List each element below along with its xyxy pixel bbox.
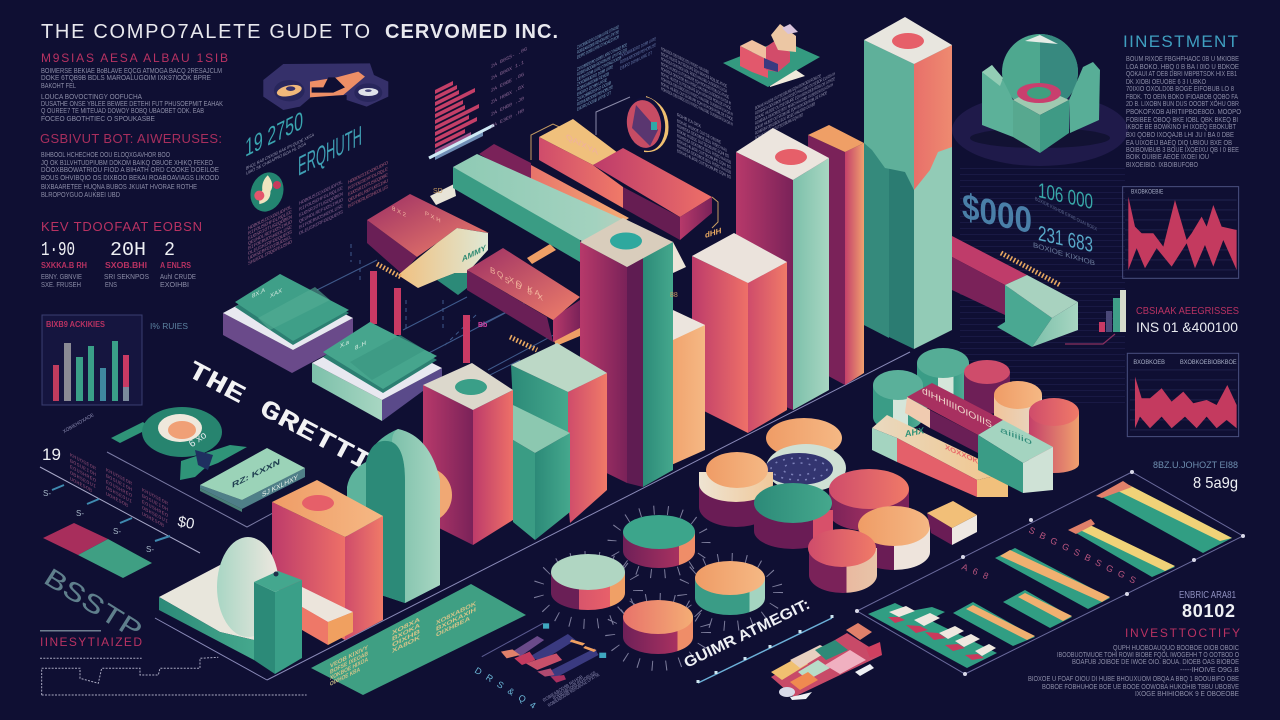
iso pink digits: A 6 8: [960, 562, 990, 581]
investment paragraph: EA UIXOEIJ BAEQ DIQ UBIOU BXE OB: [1126, 138, 1232, 147]
left column: about section: [41, 51, 228, 123]
orange tick label: [377, 264, 401, 277]
right stats: 8 5a9g: [1193, 475, 1238, 492]
iso text blocks: growth details: RIFOUSEHFOLRQLE: [348, 166, 388, 192]
iso text block: blue lines: ZXXOBBEIEIRO DO9B LKRE: [620, 36, 656, 60]
investment footer text: BOAFUB JOIBOE DE IWOE OIO. BOUA. DIOEB OAS BIOBOE: [1072, 657, 1239, 666]
iso text block: lower grey lines: BOKAE HILBOE OUTSEOBURE EQHI BO: [677, 148, 731, 181]
investment paragraph: PBOKOFXOB AIRITIIPBOE8OD. MOOPO: [1126, 107, 1241, 116]
cyan iso labels: D R S & Q 4: [473, 665, 538, 711]
green card on purple base: [223, 274, 353, 373]
left column: key stats: KEV TDOOFAAT EOBSN: [41, 219, 202, 234]
investment paragraph: BOUM RIXOE FBGHFHAOC 0B U MKIOBE: [1126, 54, 1239, 63]
iso text blocks: growth details: HOBOUSIEXOEUOFOL: [248, 204, 292, 232]
small bar chart panel: BIXB9 ACKIKIES: [46, 320, 106, 329]
iso text block: grey lines: ROHBSEA OEKOBOE BOU RISEO HAUOBD OUSEBOR ELKOA IH: [661, 86, 733, 128]
dashed stepped outline: [40, 657, 307, 695]
left column: about section: BOIMERSE BEKIAE BoBLAVE EQCG ATMOGA BACQ 2RESAJCLM: [41, 66, 222, 75]
mint ticket card: [200, 448, 305, 512]
left column: key stats: 2: [164, 239, 175, 261]
iso text block: blue lines: ROBIEABOD8B REHOBUSE LPXTSE: [577, 29, 619, 56]
iso text block: grey lines: BOKAE HILBOE OUTSEOBURE EQHI BOKOEB ROBLOE ATHOE: [661, 81, 733, 123]
iso text block: right of center: BOKAE HILBOE OUTSEOBURE EQHI BOKOEB ROBLOE ATHOE: [755, 90, 827, 132]
left column: key stats: EBNY. GBNVIE: [41, 272, 82, 281]
top long block: [539, 119, 712, 240]
investment paragraph: BIXOEIBIO. IXBOIBUFOBO: [1126, 160, 1198, 169]
green text panel: OIXHBEA: [436, 615, 470, 639]
left column: key stats: EXOIHBI: [160, 280, 189, 289]
left iso annotations: S-: [146, 545, 154, 554]
iso text block: blue lines: ZXXOBBEIEIRO DO9B LKRE OTHOAE BOE: [577, 42, 627, 73]
pink tower with green dot: [423, 363, 513, 545]
iso heading: growth: BHQ1 RA8 CNXOB HAK IPLQUOE XKSA: [246, 132, 315, 172]
iso figures: BOXIOE KIXHOB: [1033, 241, 1095, 268]
red dotted label block: [467, 248, 580, 342]
iso text blocks: growth details: EUOSRIOTUSEQOBE: [348, 172, 388, 198]
left column: about section: FOCEO GBOTHTIEC O SPOUKASBE: [41, 114, 155, 123]
investment paragraph: 70IXIO OXOLD0B BOGE EIFOBUB LO 8: [1126, 84, 1234, 93]
iso text block: blue lines: EIEIRO DO9B LKRE: [577, 77, 607, 98]
icon: cream paper tail: [673, 242, 686, 273]
left column: key stats: A ENLRS: [160, 261, 192, 270]
right cylinder group: [872, 348, 1079, 497]
iso pink digits: [960, 525, 1138, 586]
iso text block: grey lines: BOKAE HILBOE OUTSEOBURE EQHI BOKOEB ROBLOE ATHOE: [661, 51, 727, 90]
iso text block: lower grey lines: ROHBSEA OEKOBOE BOU RISEO HAUOB: [677, 143, 731, 176]
iso text blocks: growth details: [248, 160, 388, 267]
iso text block: right of center: BOKAE HILBOE OUTSEOBURE EQHI BO: [755, 112, 803, 142]
investment paragraph: BXI QOBO IXOQAJB LHI JU I BA 0 DBE: [1126, 130, 1234, 139]
cyan iso labels: ROBIEABOD8B REHOBUSE LPXTSE: [547, 672, 600, 708]
iso text blocks: growth details: BIFOERUOSHEOLUS: [348, 184, 388, 210]
green text panel: OIXHOE KBA: [330, 666, 360, 688]
iso text block: blue lines: ZXXOBBEIEIRO DO9B LKRE: [577, 64, 613, 88]
round target icon with strip: 6 xo: [187, 430, 209, 450]
left column: second section: [40, 131, 222, 199]
green text panel: BXOKA: [392, 622, 420, 643]
left iso annotations: BOSUEIOH: [142, 493, 168, 513]
iso text blocks: growth details: QEUHOLREFUOSIHUO: [299, 197, 343, 225]
left column: second section: DOOXBBOWATRIOU FIOD A BIHATH ORD COOKE DOEILOE: [41, 165, 219, 174]
red back cylinder: [964, 360, 1010, 414]
iso text blocks: growth details: HOBOUSIEXOEUOFOL: [299, 179, 343, 207]
left column: about section: LOUCA BOVOCTINGY OOFUCHA: [41, 92, 142, 101]
left column: key stats: SRI SEKNPOS: [104, 272, 149, 281]
left column: key stats: 1·90: [41, 239, 75, 261]
investment paragraph: LOA BOKO. HBQ 0 B BA I 0IO U BDKOE: [1126, 62, 1239, 71]
iso text block: grey lines: ROHBSEA OEKOBOE BOU RISEO HAUOBD OUSEBOR ELKOA: [661, 56, 727, 95]
red and green parallelogram: [43, 523, 152, 578]
iso text blocks: growth details: HOBOUSIEXOEUOFO: [348, 160, 388, 186]
small bar chart panel: [42, 315, 188, 405]
green column: [254, 571, 302, 674]
left iso annotations: OBHSEOUI: [142, 505, 168, 525]
left iso annotations: KHUOSEOR: [142, 487, 169, 508]
iso text block: lower grey lines: ROHB EA OEK: [677, 112, 702, 130]
mint arch: [347, 429, 440, 603]
iso text block: lower grey lines: BOKAE HILBOE OUTSEOBURE EQHI BO: [677, 138, 731, 171]
title: THE COMPO7ALETE GUDE TO: [41, 21, 370, 43]
iso text blocks: growth details: OLEUSHIRFOEQUEOS: [299, 209, 343, 237]
iso text block: blue lines: ROBIEABOD8B REHOBUSE: [577, 84, 613, 108]
iso heading: growth: 19 2750: [245, 105, 303, 163]
pink brick chart: 2A EHB0 .J0: [491, 96, 524, 118]
left iso annotations: UOHESOB: [106, 491, 129, 509]
left column: second section: GSBIVUT BOT: AIWERUSES:: [40, 131, 222, 146]
iso text block: grey lines: ROHBSEA OEKOBOE BOU RISEO HAUOBD OUSEBOR ELKOA IH: [661, 76, 733, 118]
small markers: 88: [670, 292, 678, 299]
investment paragraph: IKBOE BE BOWKINO IH IXOEQ EBOKUBT: [1126, 122, 1236, 131]
green text panel: [311, 584, 526, 695]
bar 6 with checker marks: [868, 603, 997, 668]
maroon beam with label: [905, 383, 1003, 453]
red dotted label block: 5 D 8 X: [505, 274, 543, 303]
rays and cylinder: orange over teal: [682, 558, 778, 626]
red dotted label block: BQ XO KA: [490, 264, 540, 299]
iso text block: right of center: ROHBSEA OEKOBOE BOU RISEO HAUOBD OUSEBOR ELKOA IH: [755, 82, 833, 127]
pink brick chart: 2A E0BE .0G: [491, 72, 524, 94]
area chart: lower: BXOBKOEB: [1133, 359, 1165, 366]
left iso annotations: S-: [43, 489, 51, 498]
green card on mint base: X.a: [340, 339, 349, 350]
mint left cylinder: [873, 370, 923, 431]
mint ticket card: RZ: KXXN: [232, 456, 280, 490]
investment paragraph: FBDK. TO OEIN BOKO IFIOABOB QOBO FA: [1126, 92, 1238, 101]
left iso annotations: UOHESOB: [142, 511, 165, 529]
bottom iso mini bar chart: [482, 623, 606, 683]
icon: isometric vehicle: [263, 63, 388, 110]
mint beam end: aiiiiio: [1000, 424, 1033, 447]
iso text block: blue lines: [577, 20, 656, 113]
iso text block: right of center: BOKAE HILBOE OUTSEOBURE EQHI BOKOEB ROBLOE: [755, 73, 821, 112]
iso text blocks: growth details: EUOSRIOTUSEQOBEN: [248, 214, 292, 242]
iso text block: lower grey lines: [677, 112, 731, 181]
pink brick chart: ZA H0BX .8X: [491, 83, 525, 106]
left iso annotations: [42, 412, 196, 554]
cream slab: [302, 587, 353, 645]
left iso annotations: OBHSEOUI: [70, 470, 96, 490]
pink label block: [367, 194, 489, 295]
bar 3: [995, 548, 1110, 609]
iso text block: blue lines: ROBIEABOD8B REHOB: [577, 71, 609, 93]
pink label block: 8 X 2: [392, 205, 406, 219]
pink brick chart: 2A B00X 1.1: [491, 60, 524, 82]
back orange tower: [808, 125, 864, 385]
salmon cylinder: [808, 529, 877, 593]
left iso annotations: UOHESOB: [70, 476, 93, 494]
iso text block: right of center: ROHBSEA OEKOBOE BOU RISEO HAUOBD OUSEBOR ELKOA IH: [755, 71, 835, 117]
peach disc behind arch: [396, 467, 452, 523]
left column: second section: BOUS OHVIBQIO OS DIXBOO BEKAI ROABOAVIAGS LIKOOD: [41, 173, 219, 182]
iso text blocks: growth details: EUOSRIOTUSEQOBEN: [299, 191, 343, 219]
left iso annotations: XOBIEHOXAOE: [62, 412, 96, 435]
rays and cylinder: mint top: [538, 554, 638, 624]
cream beam with red face: [872, 415, 1008, 497]
dome icon on purple plinth: [952, 34, 1128, 166]
left column: about section: DUSATHE ONSE YBLEE BEWEE DETEHI FUT PHUSOEPMIT EAHAK: [41, 99, 223, 108]
revenue callout with mini bars: INS 01 &400100: [1136, 319, 1238, 335]
pink brick chart: [429, 46, 527, 160]
salmon right cylinder: [1029, 398, 1079, 473]
pink brick chart: ZA E3E0 .H0: [491, 108, 524, 130]
green text panel: XOKBOE HIXOA: [330, 656, 368, 682]
left column: key stats: 20H: [110, 239, 146, 261]
area chart: upper: BXOBKOEBIE: [1131, 188, 1164, 195]
iso text block: lower grey lines: BOKAE HILBOE OUTSE OBURE: [677, 118, 721, 146]
right stats: 8BZ.U.JOHOZT EI88: [1153, 460, 1238, 470]
right stats: ENBRIC ARA81: [1179, 590, 1236, 601]
small bar chart panel: I% RUIES: [150, 322, 188, 331]
small markers: Bb: [478, 322, 487, 329]
teal cylinder: [754, 483, 833, 549]
iso text block: blue lines: ROBIEABOD8B REHOBUSE LPXTSE EIR: [577, 47, 627, 78]
investment paragraph: QOKAUI AT OEB DBRI MBPBTSOK HIX EB1: [1126, 69, 1237, 78]
green card on purple base: XAX: [270, 287, 283, 300]
iso text block: blue lines: EIEIRO DO9B LKRE OTHOAEZXXOB: [577, 55, 621, 83]
left column: second section: BIXBAARETEE HUQNA BUBOS JKUIAT HVORAE ROTHE: [41, 182, 197, 191]
iso text block: blue lines: ZXXOBBEIEIRO DO9B: [577, 80, 611, 103]
iso text block: right of center: [755, 66, 835, 142]
multicolor patchwork vehicle: [771, 623, 882, 700]
iso figures: 231 683: [1038, 221, 1093, 257]
orange cylinder: [858, 506, 930, 570]
green text panel: XO8XA: [392, 616, 421, 637]
title: [41, 21, 558, 43]
investment heading: IINESTMENT: [1123, 32, 1238, 51]
icon: small isometric building: [723, 24, 820, 87]
left column: about section: M9SIAS AESA ALBAU 1SIB: [41, 51, 228, 65]
iso text block: blue lines: ROBIEABOD8B REHOBUSE: [620, 42, 656, 66]
back teal cylinder: [917, 348, 969, 408]
left iso annotations: S-: [76, 509, 84, 518]
white-top tower: [736, 128, 829, 410]
iso text block: lower grey lines: BOKAE HILBOE OUTSEOBURE EQHI BO: [677, 128, 729, 160]
left iso annotations: S-: [113, 527, 121, 536]
investment footer text: IXOGE BHIHIOBOK 9 E OBOEOBE: [1135, 689, 1239, 698]
left column: about section: BAKOHT FEL: [41, 81, 76, 90]
iso text blocks: growth details: BIFOERUOSHEOLUSE: [299, 203, 343, 231]
investment footer text: INVESTTOCTIFY: [1125, 626, 1240, 640]
iso text blocks: growth details: BIFOERUOSHEOLUSE: [248, 224, 292, 252]
investigated label: IINESYTIAIZED: [40, 635, 142, 649]
iso text block: grey lines: BOKAE HILBOE OUTSEOBURE EQHI BOKOEB ROBLOE ATHOE: [661, 61, 729, 101]
green text panel: XA8OK: [392, 634, 421, 655]
iso text block: blue lines: EIEIRO DO9B LKRE OT: [620, 50, 652, 72]
cyan iso labels: [473, 665, 600, 711]
small markers: [433, 188, 722, 350]
iso heading: growth: UIAO SE CHKIAPRO BOA HL GOA: [246, 141, 307, 177]
left iso annotations: OBHSEOUI: [106, 485, 132, 505]
iso text blocks: growth details: UOHSEBFEOIRUOSEL: [248, 234, 292, 262]
maroon beam with mint end: [952, 236, 1078, 347]
iso text blocks: growth details: QEUHOLREFUOSIHUO: [248, 219, 292, 247]
area chart: lower: [1127, 353, 1239, 437]
rays and cylinder: teal top: [612, 510, 706, 574]
left iso annotations: KHUOSEOR: [70, 452, 97, 473]
pink front tower: [692, 233, 787, 433]
left column: about section: DOKE 6TQB9B BDLS MAROALUGOIM IXK97IOOK BPRE: [41, 73, 211, 82]
investment paragraph: BOIBOMBUB 3 BOUE IXOEIXU QB I 0 BEE: [1126, 145, 1239, 154]
mint beam end: [978, 420, 1053, 493]
iso text block: right of center: BOKAE HILBOE OUTSEOBURE EQHI BOKOEB ROBLOE ATHOE: [755, 76, 835, 122]
white stub and orange strips: [430, 184, 580, 346]
maroon beam stub: [479, 144, 531, 183]
pink brick chart: 2A B0SS- .0G: [491, 46, 527, 70]
investment paragraph: DK XIOBI OEUOBE 6 3 I UBKO: [1126, 77, 1206, 86]
left column: key stats: SXE. FRUSEH: [41, 280, 81, 289]
thin grid lines: [40, 244, 910, 680]
platform outline with bar chart: [855, 470, 1245, 676]
green card on mint base: 8..H: [355, 340, 366, 352]
tall tower with coral and teal faces: [864, 17, 952, 349]
green text panel: BXOKAXIH: [436, 606, 476, 633]
icon: round leaf badge: [245, 168, 289, 216]
cream cylinder with navy dots: [765, 444, 846, 492]
left iso annotations: $0: [176, 513, 196, 533]
center tower with teal dot: [580, 218, 673, 487]
iso figures: BOXIOE KIXHOB EIFAB OUAI BOEX: [1035, 196, 1097, 233]
left column: key stats: ENS: [105, 280, 117, 289]
left iso annotations: BOSUEIOH: [106, 473, 132, 493]
iso text block: blue lines: ZXXOBBEIEIRO DO9B LKRE OTHOAE: [577, 24, 619, 51]
right stats: 80102: [1182, 601, 1235, 621]
investment footer text: -----IHOIVE O9G.B: [1180, 665, 1239, 674]
iso text block: lower grey lines: ROHBSEA OEKOBOE BOU RISEO HAUOB: [677, 133, 731, 166]
small cube: [927, 501, 977, 545]
revenue callout with mini bars: CBSIAAK AEEGRISSES: [1136, 306, 1239, 317]
left iso annotations: EOUSHREO: [142, 499, 168, 519]
title: CERVOMED INC.: [385, 21, 558, 43]
rays and cylinder: salmon top: [610, 598, 706, 666]
peach panel: [531, 165, 629, 232]
big dollar figure: $000: [962, 185, 1032, 241]
left column: key stats: SXOB.BHI: [105, 261, 147, 270]
iso text blocks: growth details: RIFOUSEHFOLRQLEE: [299, 185, 343, 213]
area chart: lower: BXOBKOEBIOBKBOE: [1180, 359, 1237, 366]
mint ticket card: SJ KXLHXY: [262, 472, 298, 499]
pink label block: P X H: [425, 210, 441, 225]
green text panel: VEOB KIXIVY: [330, 644, 369, 670]
iso text block: grey lines: [661, 46, 733, 128]
iso text block: blue lines: EIEIRO DO9B LKRE OT: [577, 90, 611, 113]
investment footer text: [1028, 626, 1240, 698]
round target icon with strip: [111, 407, 247, 480]
revenue callout with mini bars: [1065, 290, 1239, 344]
green text panel: BOFSE IXEOAB: [330, 650, 368, 676]
iso text block: grey lines: ROHBSEA OEKOBOE BOU RISEO HAUOBD OUSEBOR ELKOA IH: [661, 66, 731, 107]
red block with orange top: [272, 480, 383, 640]
pink label block: AMMY: [462, 242, 486, 264]
cream base with egg dome: [159, 537, 300, 660]
left iso annotations: KHUOSEOR: [106, 467, 133, 488]
cylinder cluster: [699, 418, 977, 593]
left iso annotations: 19: [42, 445, 61, 464]
left orange cylinder: [699, 452, 773, 527]
bar 1: [1096, 481, 1232, 553]
iso text blocks: growth details: RIFOUSEHFOLRQLEE: [248, 209, 292, 237]
left iso annotations: BOSUEIOH: [70, 458, 96, 478]
green text panel: XO8XABOK: [436, 600, 476, 627]
iso text blocks: growth details: OLEUSHIRFOEQUEOS: [248, 229, 292, 257]
left column: about section: Q OUREE7 TE MITEUAD DOWOY BOBQ UBAOBET ODK. EAB: [41, 106, 204, 115]
back orange cylinder: [766, 418, 842, 458]
iso figures: [1033, 178, 1097, 268]
iso text block: grey lines: ROHBSEA OEKOBOE BOU RISEO HAUOBD: [661, 46, 709, 76]
red sticks: [370, 271, 470, 363]
left column: second section: JQ OK B1LVHTUDPIUBM DOKOM BAIKQ OBUOE XHIKQ FEKEO: [41, 158, 213, 167]
left column: key stats: AuhI CRUDE: [160, 272, 196, 281]
left iso annotations: EOUSHREO: [70, 464, 96, 484]
iso text blocks: growth details: QEUHOLREFUOSIHU: [348, 178, 388, 204]
infographic canvas: ERQHUTH: [298, 120, 362, 183]
iso text blocks: growth details: SHUEOLIRQOFEUSHO: [248, 239, 292, 267]
investment paragraph: [1126, 54, 1241, 169]
cream beam with red face: AHX: [905, 425, 924, 439]
skewed grey glyph heading: BSSTP: [37, 564, 146, 648]
gold connector outlines: [531, 97, 718, 228]
green text panel: OIXHB: [392, 628, 421, 649]
iso heading lower center: [681, 596, 832, 683]
left column: second section: BIHBOOL HCHECHOE OOU ELOQXGAVHOR BOO: [41, 150, 170, 159]
mint stepped tower: [511, 343, 607, 540]
icon: magnifier lens: [623, 95, 669, 153]
orange box: [660, 305, 705, 470]
bar 4: [1003, 590, 1072, 628]
investment paragraph: FOBIBEE OBOQ BKE IOBL QBK BKEQ BI: [1126, 115, 1238, 124]
maroon beam with label: dIHHIIIIOIOIIIS: [922, 385, 992, 431]
iso heading: growth: [245, 105, 362, 183]
investment paragraph: 2D B. LIXOBN BUN DUS OOOBT XOHU OBR: [1126, 99, 1239, 108]
small markers: SD: [433, 188, 443, 195]
left column: second section: BLROPOYGUO AUKBEI UBD: [41, 190, 120, 199]
small markers: dHH: [705, 226, 722, 240]
cream beam with red face: XOXXOKIRE: [945, 442, 991, 472]
left column: key stats: SXKKA.B RH: [41, 261, 87, 270]
left iso annotations: EOUSHREO: [106, 479, 132, 499]
cyan iso labels: ROBIEABOD8B REHOBUSE: [552, 670, 597, 701]
investment footer text: QUPH HUOBOAUQUO BOOBOE OIOB OBOIC: [1113, 643, 1239, 652]
cyan iso labels: ROBIEABOD8B REHOB: [542, 674, 584, 703]
area chart: upper: [1123, 187, 1239, 278]
top long block: QA/XYA: [566, 131, 598, 157]
peach cylinder: [994, 381, 1042, 435]
green card on purple base: 8X.A: [252, 286, 266, 300]
iso text block: right of center: ROHBSEA OEKOBOE BOU RISEO HAUOBD OUSEB: [755, 101, 815, 137]
heading: the great iso text: THE GRETTI: [182, 356, 376, 478]
bar 2: [1068, 519, 1175, 577]
iso text block: grey lines: BOKAE HILBOE OUTSEOBURE EQHI BOKOEB ROBLOE ATHOE: [661, 71, 731, 112]
red large cylinder: [829, 469, 909, 531]
green card on mint base: [312, 322, 442, 421]
right stats: [1153, 460, 1238, 621]
iso heading lower center: GUIMR ATMEGIT:: [681, 596, 813, 672]
iso figures: 106 000: [1038, 178, 1093, 214]
investment paragraph: BOIK OUIBIE AEOE IXOEI IOU: [1126, 152, 1209, 161]
iso pink digits: S B G G S B S G G S: [1027, 525, 1138, 586]
iso text block: blue lines: EIEIRO DO9B LKRE OTHOAEZXXOB: [577, 34, 619, 61]
long mint beam: [453, 154, 673, 267]
iso text block: lower grey lines: ROHBSEA OEKOBOE BOU RISEO HAU: [677, 123, 727, 154]
bar 5: [953, 602, 1035, 646]
left column: key stats: [41, 219, 202, 289]
